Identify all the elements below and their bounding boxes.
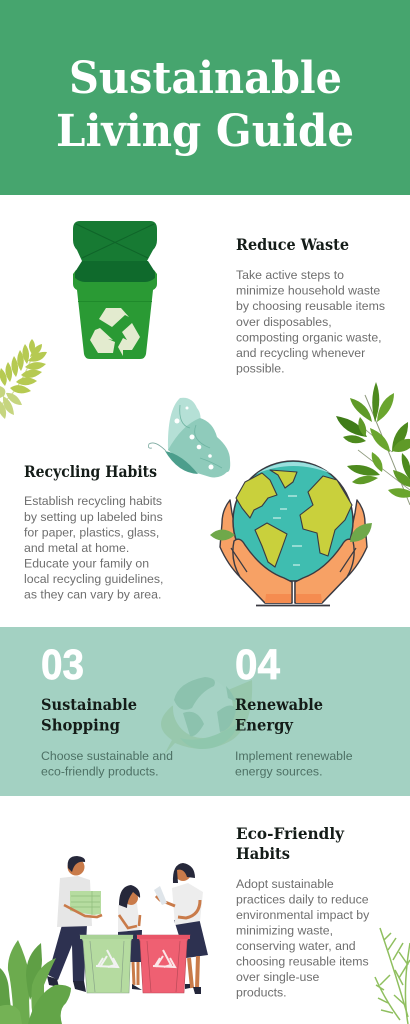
- text: Recycling Habits body: Establish recycling habits: [24, 494, 162, 508]
- text: Eco-Friendly Habits body: minimizing waste,: [236, 924, 333, 938]
- text: Eco-Friendly Habits body: products.: [236, 986, 287, 1000]
- icon: fern bottom right: [375, 928, 410, 1024]
- heading: Eco-Friendly Habits: Habits: [236, 844, 290, 863]
- icon: right hand front: [295, 539, 354, 603]
- column: Renewable Energy: energy sources.: [235, 764, 322, 778]
- panel: teal band: [0, 627, 410, 796]
- text: Recycling Habits body: by setting up labeled bins: [24, 510, 163, 524]
- icon: butterfly: [148, 398, 230, 477]
- text: Recycling Habits body: and metal at home.: [24, 541, 129, 555]
- text: Eco-Friendly Habits body: Adopt sustainable: [236, 877, 334, 891]
- text: Reduce Waste body: possible.: [236, 362, 285, 376]
- icon: globe: [233, 461, 353, 581]
- text: Recycling Habits body: local recycling guidelines,: [24, 572, 163, 586]
- figure: woman: [154, 863, 208, 994]
- text: Recycling Habits body: Educate your family on: [24, 556, 149, 570]
- text: Eco-Friendly Habits body: over single-use: [236, 970, 320, 984]
- text: Reduce Waste body: and recycling whenever: [236, 346, 365, 360]
- column: Renewable Energy: [235, 641, 353, 778]
- column: Renewable Energy: 04: [235, 641, 280, 689]
- figure: man: [47, 856, 102, 992]
- icon: green plant bottom left: [0, 940, 71, 1024]
- icon: fern top left: [0, 339, 47, 419]
- icon: left hand back: [220, 500, 292, 603]
- illustration: family recycling: [47, 856, 208, 994]
- text: Eco-Friendly Habits body: environmental impact by: [236, 908, 370, 922]
- column: Renewable Energy: Energy: [235, 716, 294, 734]
- title: Living Guide: [56, 106, 354, 157]
- heading: Recycling Habits: Recycling Habits: [24, 462, 157, 481]
- icon: right leaf: [350, 523, 372, 542]
- column: Sustainable Shopping: [41, 641, 173, 778]
- text: Recycling Habits body: for paper, plastics, glass,: [24, 526, 159, 540]
- icon: recycle arrows: [90, 308, 140, 356]
- icon: right hand back: [295, 500, 367, 603]
- text: Eco-Friendly Habits body: conserving water, and: [236, 939, 356, 953]
- icon: bamboo branch: [336, 382, 410, 505]
- icon: hands holding globe: [210, 461, 372, 606]
- icon: green bin: [80, 935, 133, 993]
- text: Reduce Waste body: by choosing reusable items: [236, 299, 385, 313]
- column: Sustainable Shopping: Choose sustainable and: [41, 749, 173, 763]
- text: Recycling Habits body: as they can vary by area.: [24, 588, 161, 602]
- text: Reduce Waste body: Take active steps to: [236, 268, 344, 282]
- title: Sustainable: [69, 53, 342, 104]
- text: Reduce Waste body: composting organic waste,: [236, 330, 382, 344]
- text: Reduce Waste body: minimize household waste: [236, 284, 380, 298]
- header banner: [0, 0, 410, 195]
- column: Renewable Energy: Renewable: [235, 695, 323, 714]
- figure: girl: [118, 885, 142, 990]
- heading: Reduce Waste: Reduce Waste: [236, 235, 349, 254]
- column: Sustainable Shopping: 03: [41, 641, 84, 689]
- text: Eco-Friendly Habits body: choosing reusable items: [236, 954, 369, 968]
- icon: red bin: [137, 935, 190, 993]
- icon: faded globe and leaf: [161, 677, 252, 755]
- title: [56, 53, 354, 157]
- icon: left hand front: [233, 539, 292, 603]
- heading: Eco-Friendly Habits: [236, 824, 345, 863]
- column: Sustainable Shopping: Sustainable: [41, 695, 137, 714]
- text: Reduce Waste body: over disposables,: [236, 315, 332, 329]
- column: Renewable Energy: Implement renewable: [235, 749, 353, 763]
- column: Sustainable Shopping: eco-friendly products.: [41, 764, 159, 778]
- column: Sustainable Shopping: Shopping: [41, 716, 120, 734]
- heading: Eco-Friendly Habits: Eco-Friendly: [236, 824, 345, 843]
- text: Eco-Friendly Habits body: practices daily to reduce: [236, 892, 369, 906]
- icon: recycling bin: [73, 221, 157, 359]
- icon: left leaf: [210, 530, 235, 540]
